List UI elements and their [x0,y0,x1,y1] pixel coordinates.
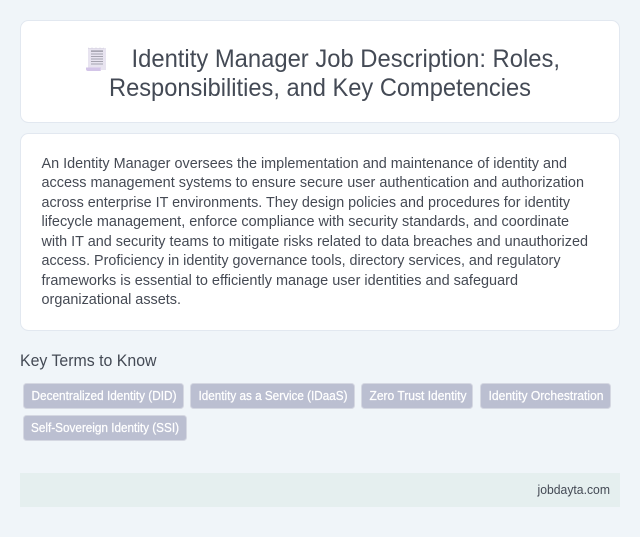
title: Identity Manager Job Description: Roles, [132,45,560,73]
icon: document scroll [86,48,106,71]
chip: Identity as a Service (IDaaS): Identity as a Service (IDaaS) [198,389,348,403]
chip: Self-Sovereign Identity (SSI): Self-Sovereign Identity (SSI) [31,421,179,435]
footer [20,473,620,507]
description text: with IT and security teams to mitigate risks related to data breaches and unauthorized [41,234,588,250]
chip: Decentralized Identity (DID) [24,384,184,408]
chip: Zero Trust Identity [362,384,472,408]
description text: organizational assets. [42,292,181,308]
panel: title card [20,20,620,122]
description text [41,156,588,308]
title: Responsibilities, and Key Competencies [109,74,531,102]
chip: Identity Orchestration: Identity Orchestration [488,389,604,403]
description text: across enterprise IT environments. They design policies and procedures for identity [42,195,571,211]
chip: Self-Sovereign Identity (SSI) [24,416,186,440]
chip: Identity Orchestration [480,384,610,408]
description text: An Identity Manager oversees the implementation and maintenance of identity and [42,156,567,172]
chip: Identity as a Service (IDaaS) [190,384,354,408]
panel: description card [20,134,620,330]
description text: frameworks is essential to efficiently manage user identities and safeguard [42,273,518,289]
title [109,45,560,102]
description text: access. Proficiency in identity governance tools, directory services, and regulatory [42,253,561,269]
chip: Zero Trust Identity: Zero Trust Identity [370,389,467,403]
heading: key terms: Key Terms to Know [20,352,157,370]
chip: Decentralized Identity (DID): Decentralized Identity (DID) [32,389,176,403]
description text: lifecycle management, enforce compliance with security standards, and coordinate [42,214,569,230]
description text: access management systems to ensure secure user authentication and authorization [42,175,584,191]
footer: jobdayta.com [537,483,610,497]
